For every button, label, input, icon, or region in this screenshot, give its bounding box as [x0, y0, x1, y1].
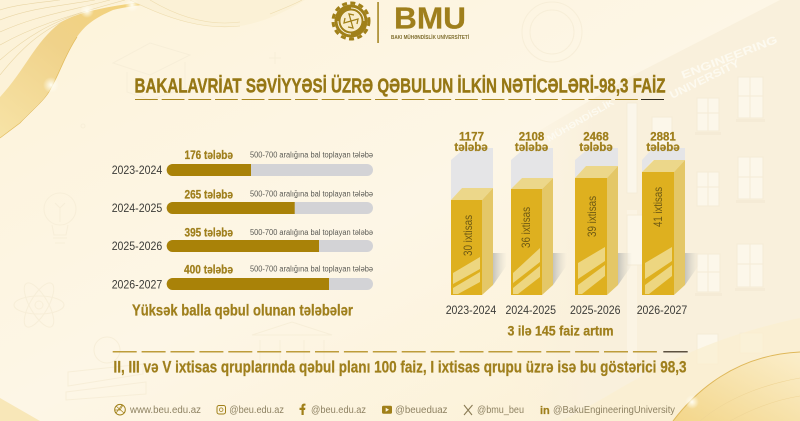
facebook: @beu.edu.az: [311, 405, 366, 416]
bar 2025-2026: [570, 132, 632, 317]
bar 2024-2025: 2108: [519, 132, 545, 144]
bar 2026-2027: [637, 132, 699, 317]
row 2025-2026: [112, 228, 374, 253]
dashed divider: [113, 351, 688, 353]
bar 2026-2027: 2026-2027: [637, 303, 687, 317]
bar 2024-2025: [506, 132, 567, 317]
bar 2026-2027: 2881: [650, 132, 676, 144]
bar 2024-2025: 36 ixtisas: [519, 207, 533, 248]
row 2024-2025: 265 tələbə: [184, 189, 233, 201]
row 2025-2026: 395 tələbə: [184, 228, 233, 240]
icon: gear emblem: [333, 3, 369, 39]
footer social links: [115, 404, 675, 417]
row 2023-2024: 176 tələbə: [184, 150, 233, 162]
building watermark: UNIVERSITY: [668, 57, 742, 102]
row 2023-2024: 500-700 aralığına bal toplayan tələbə: [250, 150, 374, 159]
bar 2023-2024: tələbə: [454, 142, 488, 154]
bar 2024-2025: tələbə: [515, 142, 548, 154]
building watermark: MÜHƏNDİSLİK: [545, 97, 616, 144]
panel caption: Yüksək balla qəbul olunan tələbələr: [132, 303, 353, 320]
bar 2023-2024: 30 ixtisas: [461, 215, 475, 256]
instagram: @beu.edu.az: [229, 405, 284, 416]
bottom-right gold swoosh: [560, 318, 800, 421]
logo: BAKI MÜHƏNDİSLİK UNİVERSİTETİ: [391, 34, 470, 41]
facebook: [300, 404, 366, 416]
youtube: @beueduaz: [395, 405, 448, 416]
website: www.beu.edu.az: [129, 405, 201, 416]
bar 2024-2025: 2024-2025: [506, 303, 556, 317]
linkedin: @BakuEngineeringUniversity: [553, 405, 675, 416]
bar 2025-2026: 39 ixtisas: [585, 196, 599, 237]
bar 2026-2027: tələbə: [646, 142, 680, 154]
row 2024-2025: [112, 189, 374, 215]
linkedin: in: [540, 405, 550, 417]
growth caption: 3 ilə 145 faiz artım: [508, 324, 614, 338]
row 2024-2025: 500-700 aralığına bal toplayan tələbə: [250, 190, 374, 199]
bar 2023-2024: 2023-2024: [446, 303, 496, 317]
row 2024-2025: 2024-2025: [112, 201, 162, 215]
row 2026-2027: 500-700 aralığına bal toplayan tələbə: [250, 265, 374, 274]
panel: high score students: [112, 150, 374, 320]
row 2025-2026: 2025-2026: [112, 239, 162, 253]
row 2025-2026: 500-700 aralığına bal toplayan tələbə: [250, 228, 374, 237]
bar 2023-2024: [446, 132, 507, 317]
row 2026-2027: [112, 264, 374, 291]
title dashed underline: [135, 98, 664, 100]
faint education doodles: [14, 2, 582, 400]
row 2026-2027: 400 tələbə: [184, 264, 233, 276]
x: @bmu_beu: [477, 405, 524, 416]
panel: 3D bar chart: [446, 132, 699, 338]
row 2026-2027: 2026-2027: [112, 277, 162, 291]
bar 2025-2026: 2025-2026: [570, 303, 621, 317]
building watermark: ENGINEERING: [680, 34, 779, 82]
logo: BMU: [394, 0, 466, 36]
row 2023-2024: 2023-2024: [112, 163, 162, 177]
building watermark: [510, 0, 800, 421]
logo: [333, 0, 470, 43]
bar 2023-2024: 1177: [459, 132, 484, 144]
top-left ribbon and wave lines: [0, 0, 305, 138]
row 2023-2024: [112, 150, 374, 177]
bar 2025-2026: tələbə: [579, 142, 613, 154]
bar 2026-2027: 41 ixtisas: [651, 187, 665, 227]
bottom-left corner gold: [0, 398, 40, 421]
bar 2025-2026: 2468: [583, 132, 609, 144]
